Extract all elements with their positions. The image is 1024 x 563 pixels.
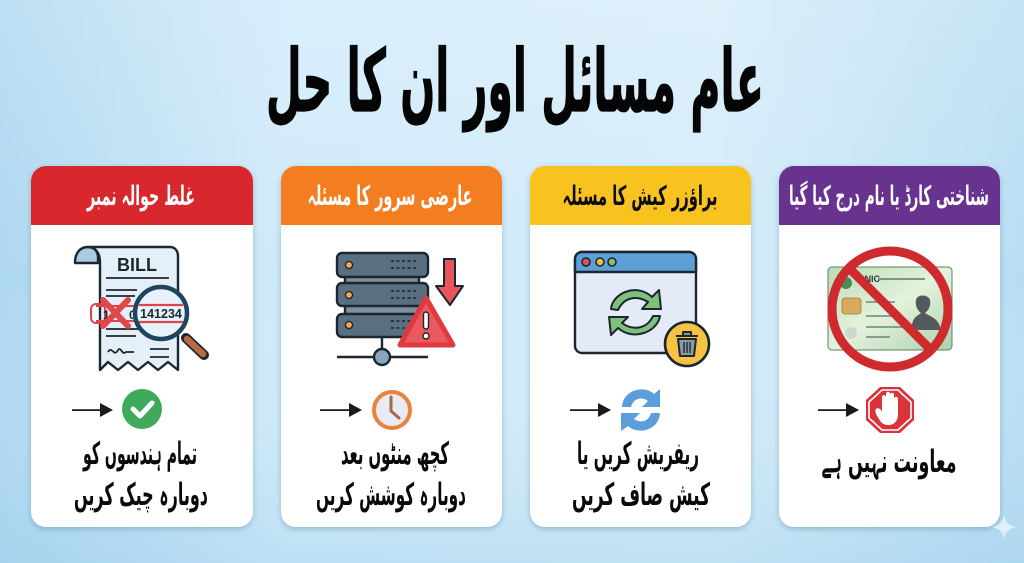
panel: wrong reference number bbox=[31, 166, 253, 527]
panel header: wrong reference number bbox=[31, 166, 253, 225]
icon: crossed out ID card: CNIC bbox=[858, 274, 880, 284]
icon: bill under magnifier: 141234 bbox=[140, 307, 182, 321]
icon: stop hand bbox=[866, 387, 914, 433]
panel: ID card or name entered bbox=[779, 166, 1000, 527]
panel header: browser cache issue: براؤزر کیش کا مسئلہ bbox=[562, 181, 718, 212]
solution text: ریفریش کریں یا bbox=[577, 436, 699, 472]
panel: browser cache issue bbox=[530, 166, 751, 527]
icon: bill under magnifier: BILL bbox=[117, 255, 157, 275]
icon: server with warning bbox=[337, 253, 463, 365]
solution text: کیش صاف کریں bbox=[572, 477, 711, 513]
icon: blue refresh bbox=[621, 389, 660, 431]
solution text bbox=[316, 436, 466, 513]
solution text bbox=[74, 436, 208, 513]
solution text: دوبارہ چیک کریں bbox=[74, 477, 208, 513]
panel: wrong reference number: تمام ہندسوں کو bbox=[82, 436, 197, 472]
icon: browser window with refresh and trash bbox=[575, 252, 709, 366]
arrow bbox=[818, 403, 859, 417]
panel header: ID card or name entered bbox=[779, 166, 1000, 225]
arrow bbox=[570, 403, 611, 417]
icon: bill under magnifier: 1 bbox=[103, 308, 110, 322]
icon: bill under magnifier bbox=[75, 247, 204, 370]
solution text: کچھ منٹوں بعد bbox=[341, 436, 449, 472]
panel: temporary server issue bbox=[281, 166, 502, 527]
panel: temporary server issue: دوبارہ کوشش کریں bbox=[316, 477, 466, 513]
arrow bbox=[320, 403, 362, 417]
icon: crossed out ID card bbox=[828, 251, 952, 367]
icon: green check bbox=[122, 389, 162, 429]
arrow bbox=[72, 403, 113, 417]
panel header: temporary server issue: عارضی سرور کا مسئلہ bbox=[308, 181, 472, 212]
icon: clock bbox=[374, 392, 410, 428]
panel header: temporary server issue bbox=[281, 166, 502, 225]
solution text bbox=[572, 436, 711, 513]
panel header: wrong reference number: غلط حوالہ نمبر bbox=[86, 181, 195, 212]
panel header: browser cache issue bbox=[530, 166, 751, 225]
icon: bill under magnifier: 0 bbox=[129, 308, 136, 322]
icon: sparkle bbox=[991, 514, 1017, 540]
